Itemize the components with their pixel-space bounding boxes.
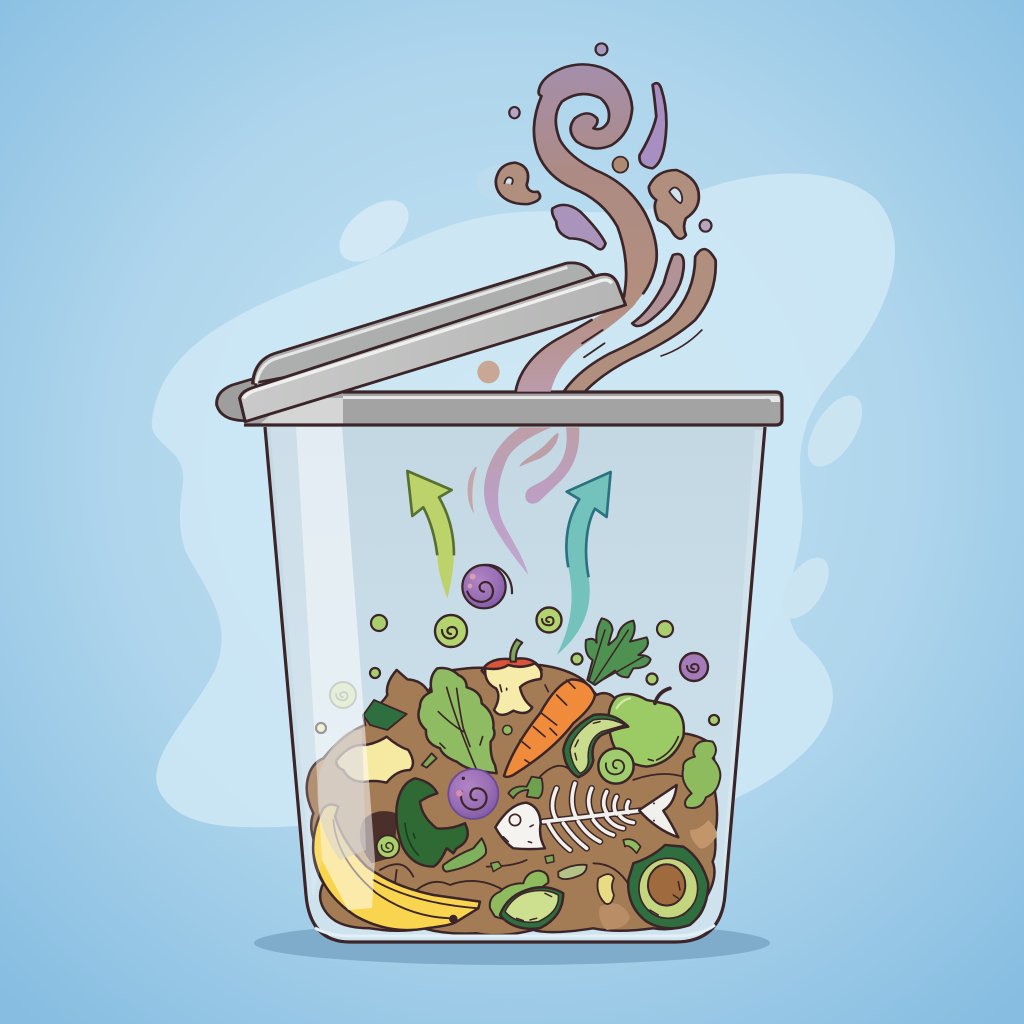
brown tan lump	[690, 820, 717, 848]
spore: green swirl one	[435, 615, 467, 647]
odor droplets	[477, 43, 711, 383]
avocado slice bottom with lettuce	[490, 871, 563, 929]
purple droplet lower	[552, 205, 606, 249]
odor streak inner	[632, 254, 684, 326]
leafy greens	[418, 668, 497, 773]
spores: small green dots	[316, 615, 719, 733]
spore: large purple swirl	[462, 565, 512, 608]
cream scrap	[336, 737, 413, 783]
bucket outline	[265, 427, 765, 942]
spores: floating bubbles	[316, 565, 719, 733]
green sprout near fish	[508, 777, 543, 798]
green apple	[608, 688, 684, 767]
main odor swirl fill	[534, 64, 657, 305]
lid back panel	[253, 263, 595, 383]
green lettuce scrap right	[683, 741, 720, 808]
small green swirl on pile	[377, 835, 399, 858]
brown blob right	[649, 170, 699, 239]
inner odor wisps	[468, 427, 579, 575]
lid hinge	[217, 378, 262, 421]
apple core	[482, 639, 548, 715]
arrow: green upward	[407, 471, 454, 598]
odor swirl plume above bin	[477, 43, 716, 392]
glass highlight band over food	[270, 427, 765, 910]
arrow: teal upward	[557, 472, 611, 655]
odor streak outer	[564, 249, 716, 392]
green small stem	[422, 753, 437, 768]
carrot greens	[586, 618, 651, 685]
small green soil scraps	[491, 725, 641, 904]
carrot	[504, 679, 595, 777]
purple droplet right	[639, 83, 666, 168]
avocado half	[628, 845, 708, 928]
motion line	[661, 330, 702, 356]
main odor swirl outline	[534, 64, 657, 297]
soil clump lines	[380, 766, 683, 890]
spore: green swirl two	[536, 608, 562, 632]
purple swirl on pile	[448, 769, 498, 819]
food waste pile	[307, 618, 720, 935]
spore: purple small swirl	[680, 653, 708, 681]
lower odor ribbon	[516, 302, 636, 392]
banana	[313, 805, 480, 930]
dark green scrap	[363, 700, 407, 730]
dark green pepper	[396, 778, 468, 867]
bucket glass body	[265, 427, 765, 942]
fish skeleton	[495, 783, 678, 850]
dark hole	[360, 811, 397, 863]
tilted lid	[217, 263, 626, 422]
spore: faded green swirl	[330, 682, 356, 708]
compost soil	[307, 665, 717, 935]
avocado slice crescent	[563, 714, 628, 777]
green swirl bubble on pile	[598, 748, 634, 784]
brown blob left	[496, 163, 540, 204]
bucket rim	[244, 392, 782, 425]
ground shadow	[254, 921, 770, 965]
background pale blob	[152, 165, 895, 827]
lid front panel	[240, 274, 626, 422]
green celery piece	[443, 838, 486, 872]
